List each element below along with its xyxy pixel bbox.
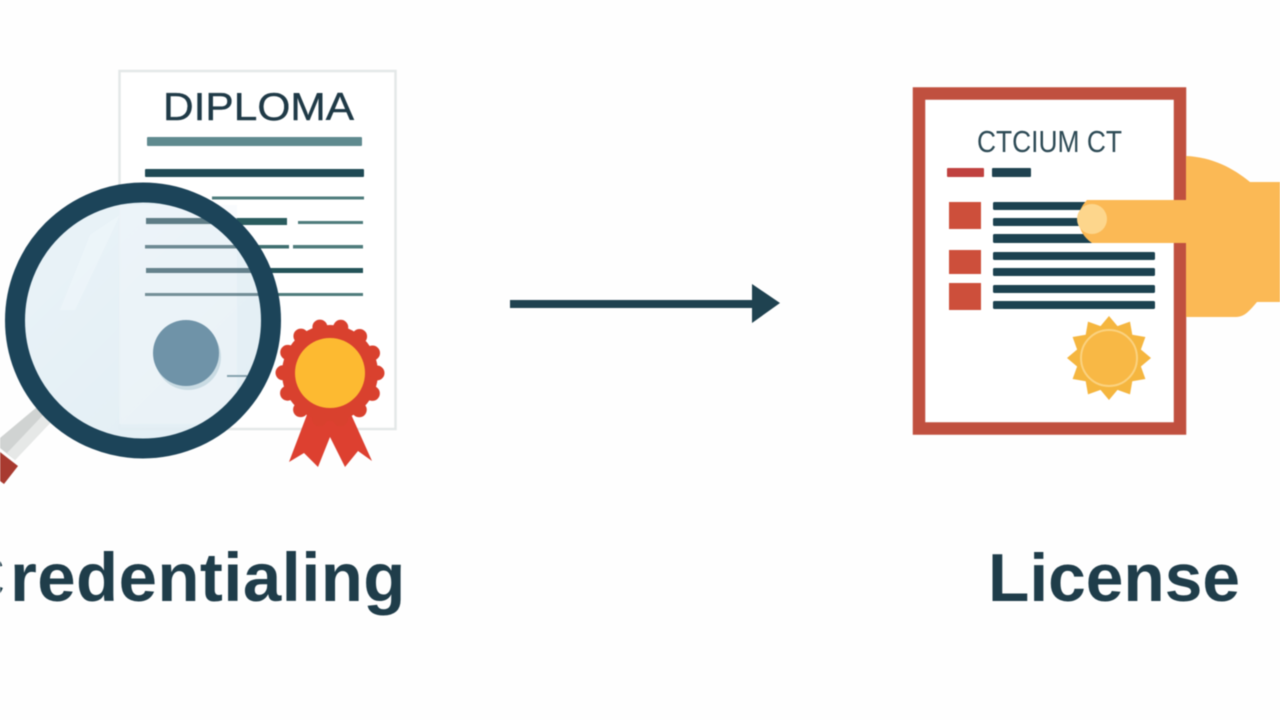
- magnifier lens: [15, 192, 271, 448]
- label: License: License: [988, 540, 1240, 616]
- diploma text lines: [145, 137, 364, 296]
- certificate checkboxes: [949, 202, 981, 310]
- certificate heading: CTCIUM CT: [977, 124, 1122, 159]
- certificate header bars: [947, 168, 1031, 177]
- fingertip: [1077, 204, 1107, 234]
- rosette ribbons: [289, 412, 372, 467]
- icon: diploma document: [120, 71, 396, 429]
- label: Credentialing: redentialing: [10, 539, 406, 616]
- icon: license certificate: [919, 94, 1180, 428]
- icon: pointing hand: [1077, 156, 1280, 317]
- icon: magnifying glass: [0, 182, 282, 484]
- rosette centre: [295, 338, 365, 408]
- icon: award rosette: [282, 325, 378, 467]
- arrow: [510, 284, 780, 323]
- diploma heading: DIPLOMA: [163, 86, 354, 129]
- certificate gold seal: [1067, 316, 1151, 400]
- magnifier handle: [0, 407, 50, 460]
- lines seen through the lens: [144, 217, 259, 297]
- lens seal: [155, 324, 221, 390]
- certificate text lines: [993, 202, 1155, 309]
- magnifier rim: [15, 192, 271, 448]
